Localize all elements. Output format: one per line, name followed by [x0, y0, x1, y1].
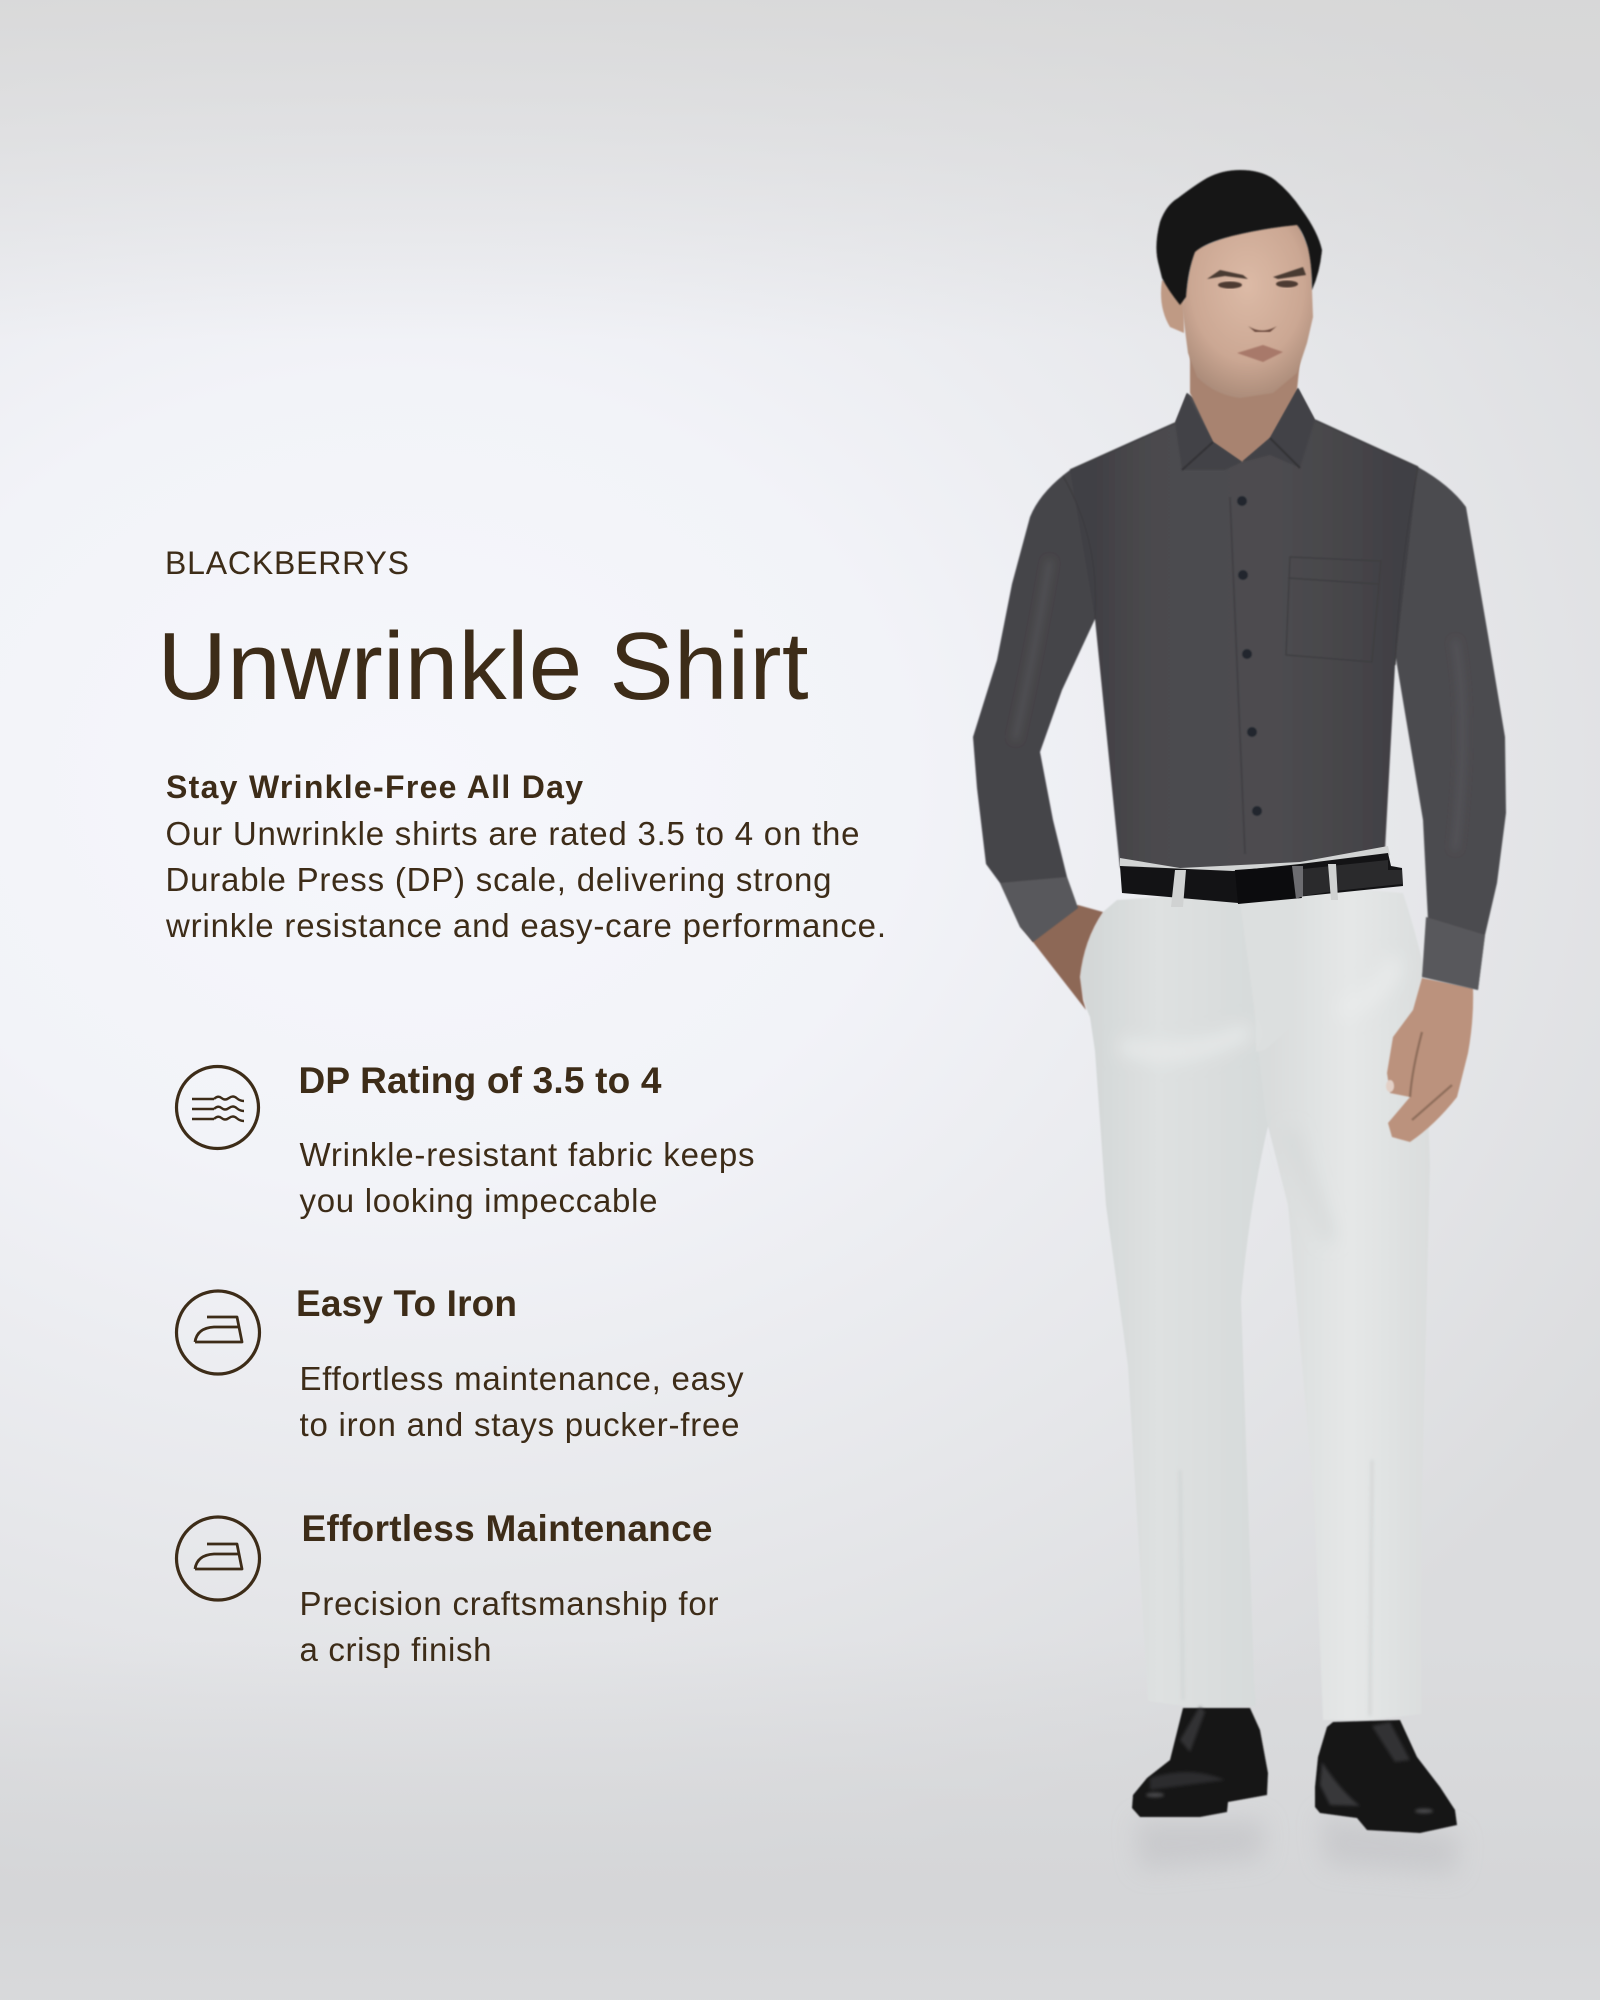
intro text block — [165, 769, 886, 944]
buckle — [1235, 866, 1302, 904]
icon: iron — [176, 1291, 260, 1374]
belt loops — [1171, 864, 1338, 907]
lips — [1237, 345, 1283, 362]
icon: fabric waves — [176, 1066, 258, 1148]
eyebrows — [1207, 267, 1306, 279]
trousers — [1080, 885, 1430, 1720]
pocket — [1286, 557, 1381, 662]
nose — [1248, 326, 1277, 332]
right cuff — [1422, 917, 1485, 990]
heading: DP Rating of 3.5 to 4 — [298, 1060, 662, 1101]
belt — [1120, 846, 1403, 907]
ear — [1161, 280, 1184, 333]
description: Precision craftsmanship for — [300, 1585, 718, 1622]
hand in pocket — [1022, 905, 1103, 1010]
hand on thigh — [1386, 978, 1473, 1142]
intro text block: Our Unwrinkle shirts are rated 3.5 to 4 on the — [166, 815, 860, 852]
description: Effortless maintenance, easy — [300, 1360, 744, 1397]
neck — [1190, 350, 1300, 462]
shoes — [1132, 1706, 1457, 1833]
intro text block: Durable Press (DP) scale, delivering strong — [166, 861, 832, 898]
description: to iron and stays pucker-free — [300, 1406, 740, 1443]
icon: iron — [176, 1517, 260, 1600]
seams — [1063, 420, 1418, 665]
trouser folds — [1120, 960, 1395, 1240]
description: you looking impeccable — [300, 1182, 658, 1219]
left cuff — [1000, 877, 1078, 942]
heading: Easy To Iron — [296, 1283, 517, 1324]
description: a crisp finish — [300, 1631, 492, 1668]
placket — [1230, 497, 1245, 854]
title: Unwrinkle Shirt — [158, 613, 808, 720]
left shoe — [1132, 1708, 1268, 1817]
intro text block: wrinkle resistance and easy-care performance. — [165, 907, 886, 944]
shirt — [973, 388, 1506, 990]
sleeve folds — [1015, 560, 1462, 850]
feature: DP rating — [176, 1060, 754, 1219]
eyes — [1218, 282, 1242, 288]
floor reflections — [1135, 1815, 1460, 1875]
feature: effortless maintenance — [176, 1508, 718, 1668]
model figure — [973, 170, 1506, 1875]
hair — [1156, 170, 1322, 305]
heading: Effortless Maintenance — [302, 1508, 712, 1549]
right shoe — [1315, 1720, 1457, 1833]
intro heading: Stay Wrinkle-Free All Day — [166, 769, 583, 805]
description — [300, 1360, 744, 1443]
brand name: BLACKBERRYS — [165, 545, 409, 581]
torso — [1070, 388, 1418, 875]
right sleeve — [1380, 467, 1506, 990]
buttons — [1237, 496, 1262, 816]
feature: easy to iron — [176, 1283, 744, 1443]
description — [300, 1585, 718, 1668]
description: Wrinkle-resistant fabric keeps — [300, 1136, 754, 1173]
left sleeve — [973, 470, 1110, 942]
face — [1182, 222, 1313, 398]
description — [300, 1136, 754, 1219]
collar — [1175, 388, 1315, 470]
head — [1156, 170, 1322, 398]
